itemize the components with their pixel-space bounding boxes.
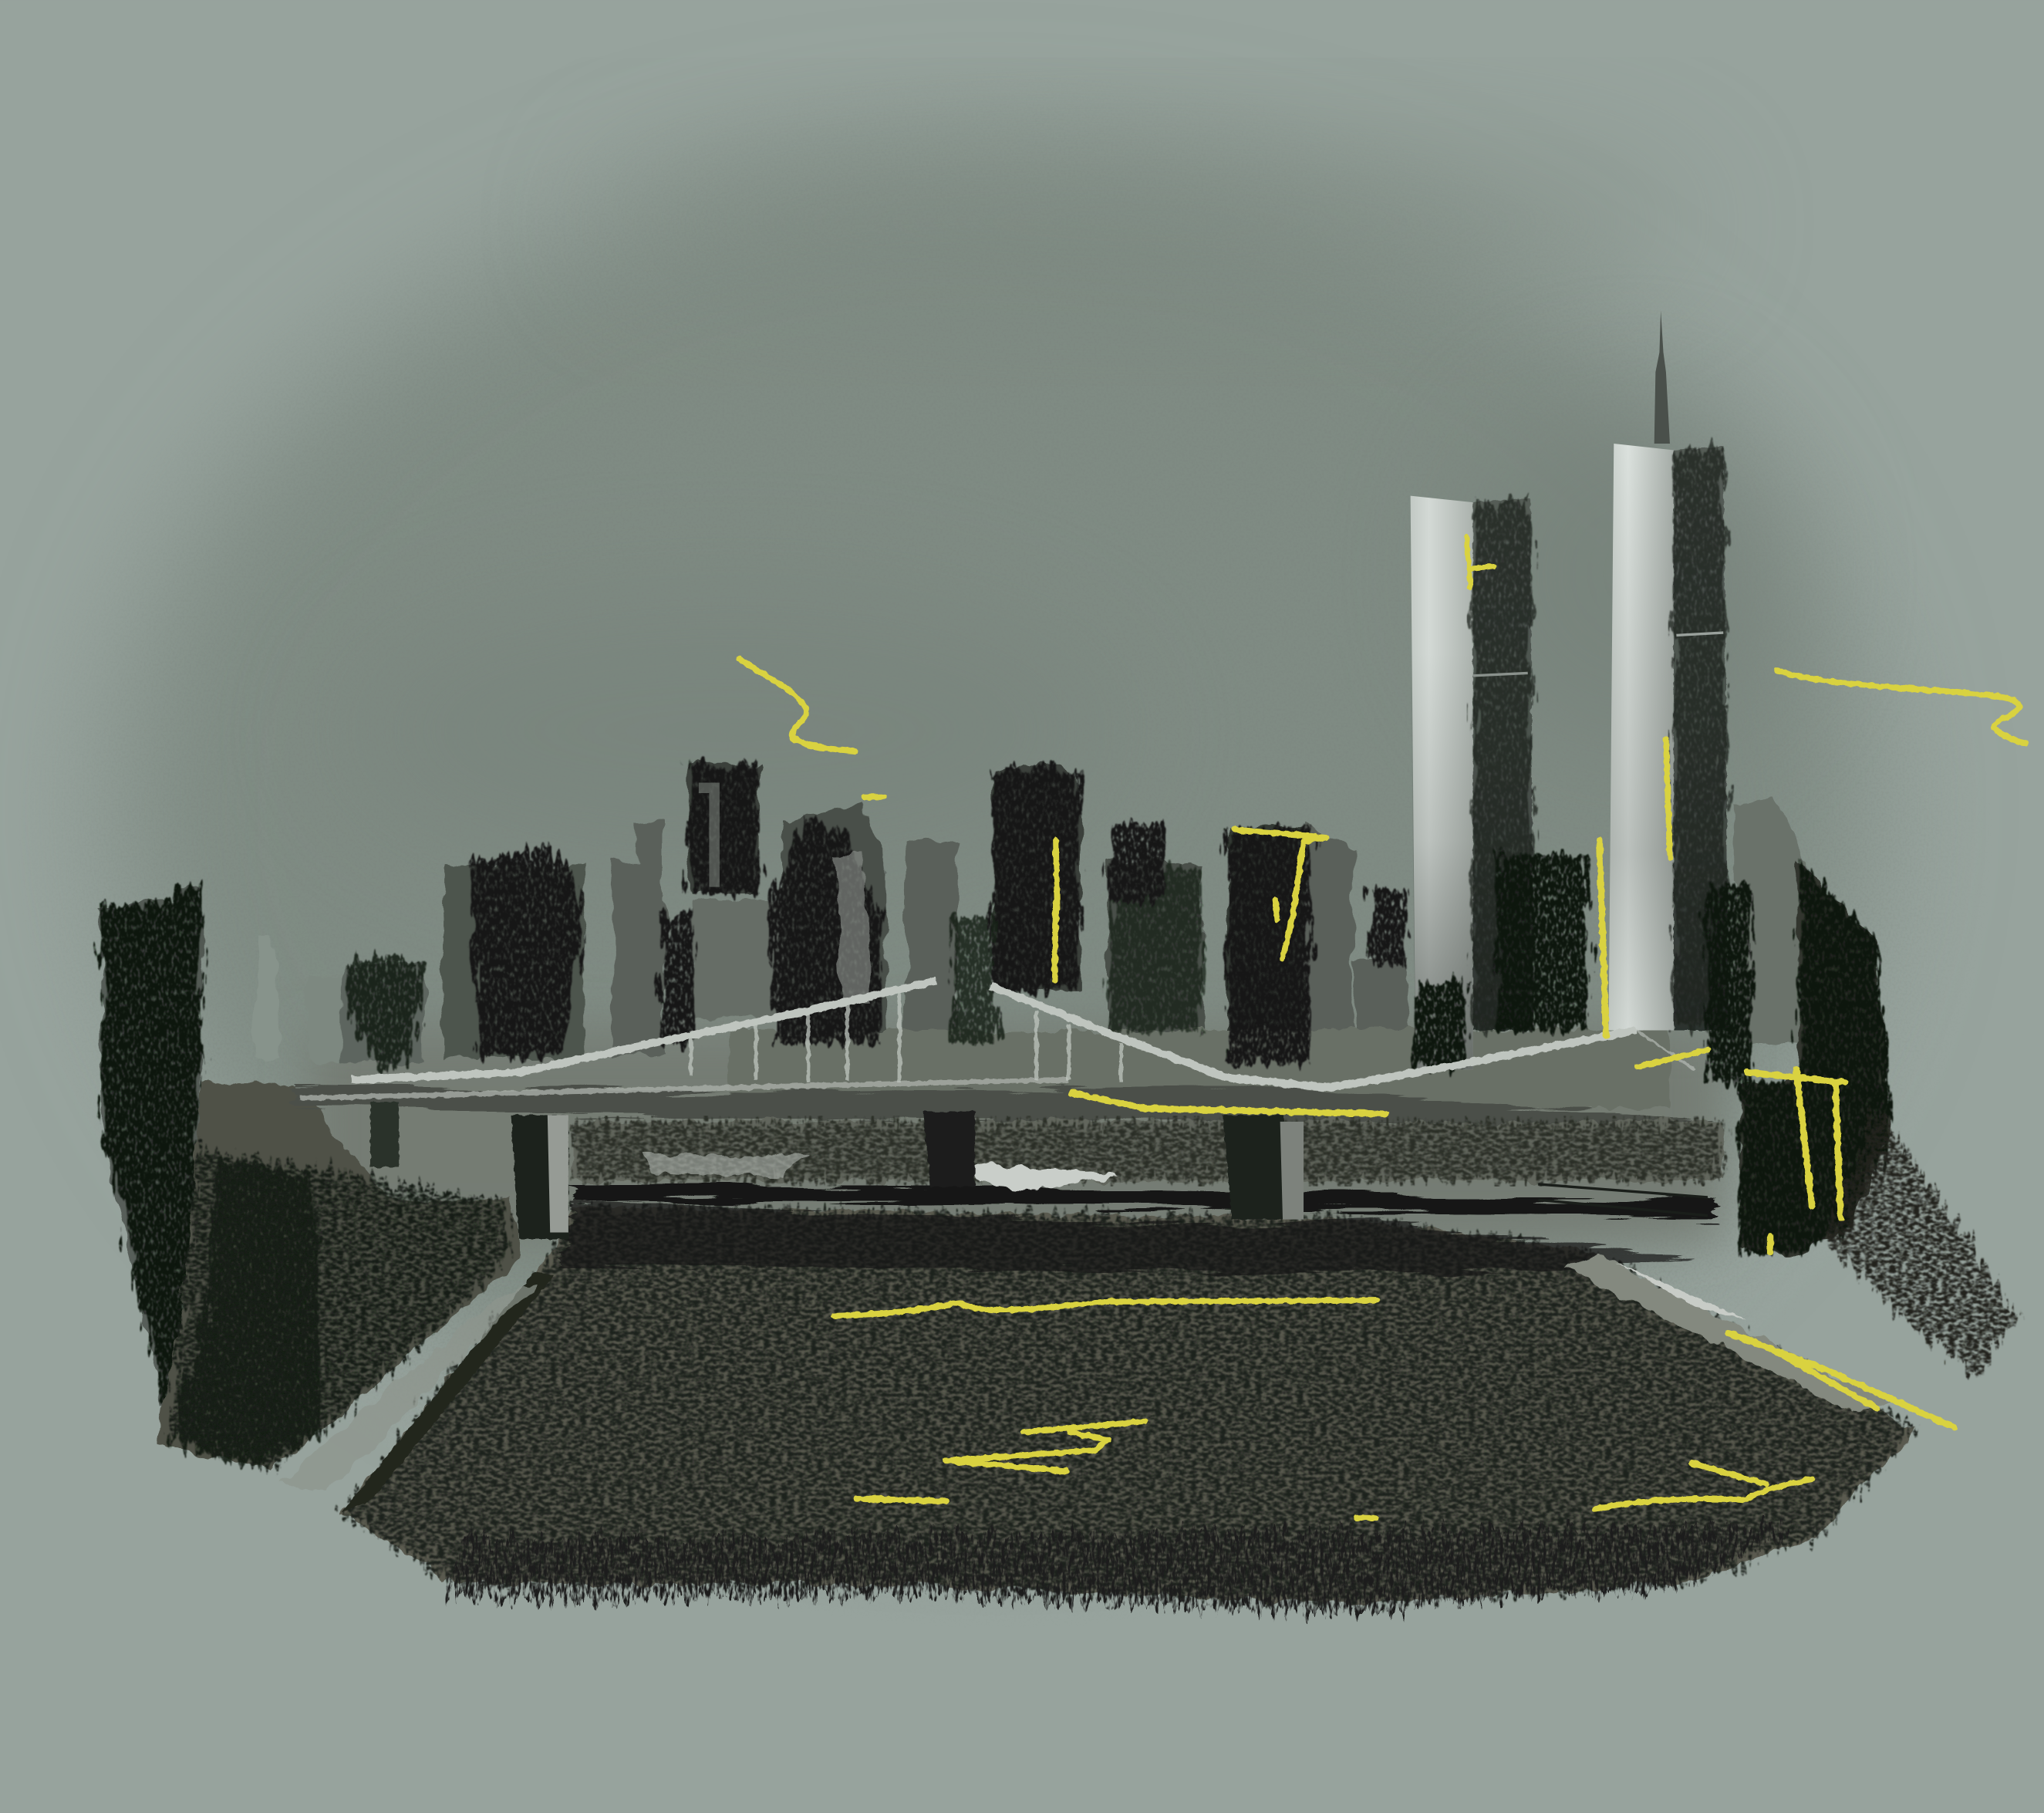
bridge pillars — [370, 1102, 1304, 1239]
inner building windows — [699, 782, 873, 1004]
left embankment — [157, 1082, 521, 1467]
dark buildings — [346, 763, 1408, 1069]
bridge cables — [352, 981, 1695, 1088]
distant skyline — [255, 763, 1806, 1109]
yellow crayon strokes — [739, 538, 2025, 1518]
road ground — [280, 1200, 1916, 1615]
Twin Tower: left — [1411, 496, 1533, 1069]
right dark towers — [1740, 861, 2014, 1376]
buildings in front of towers — [1415, 854, 1752, 1082]
far left tower — [102, 887, 208, 1402]
sky haze — [73, 86, 1912, 1383]
bridge deck and water band — [293, 1080, 1721, 1218]
Twin Tower: right with antenna — [1609, 311, 1729, 1031]
ground tone under skyline — [313, 1031, 1721, 1239]
